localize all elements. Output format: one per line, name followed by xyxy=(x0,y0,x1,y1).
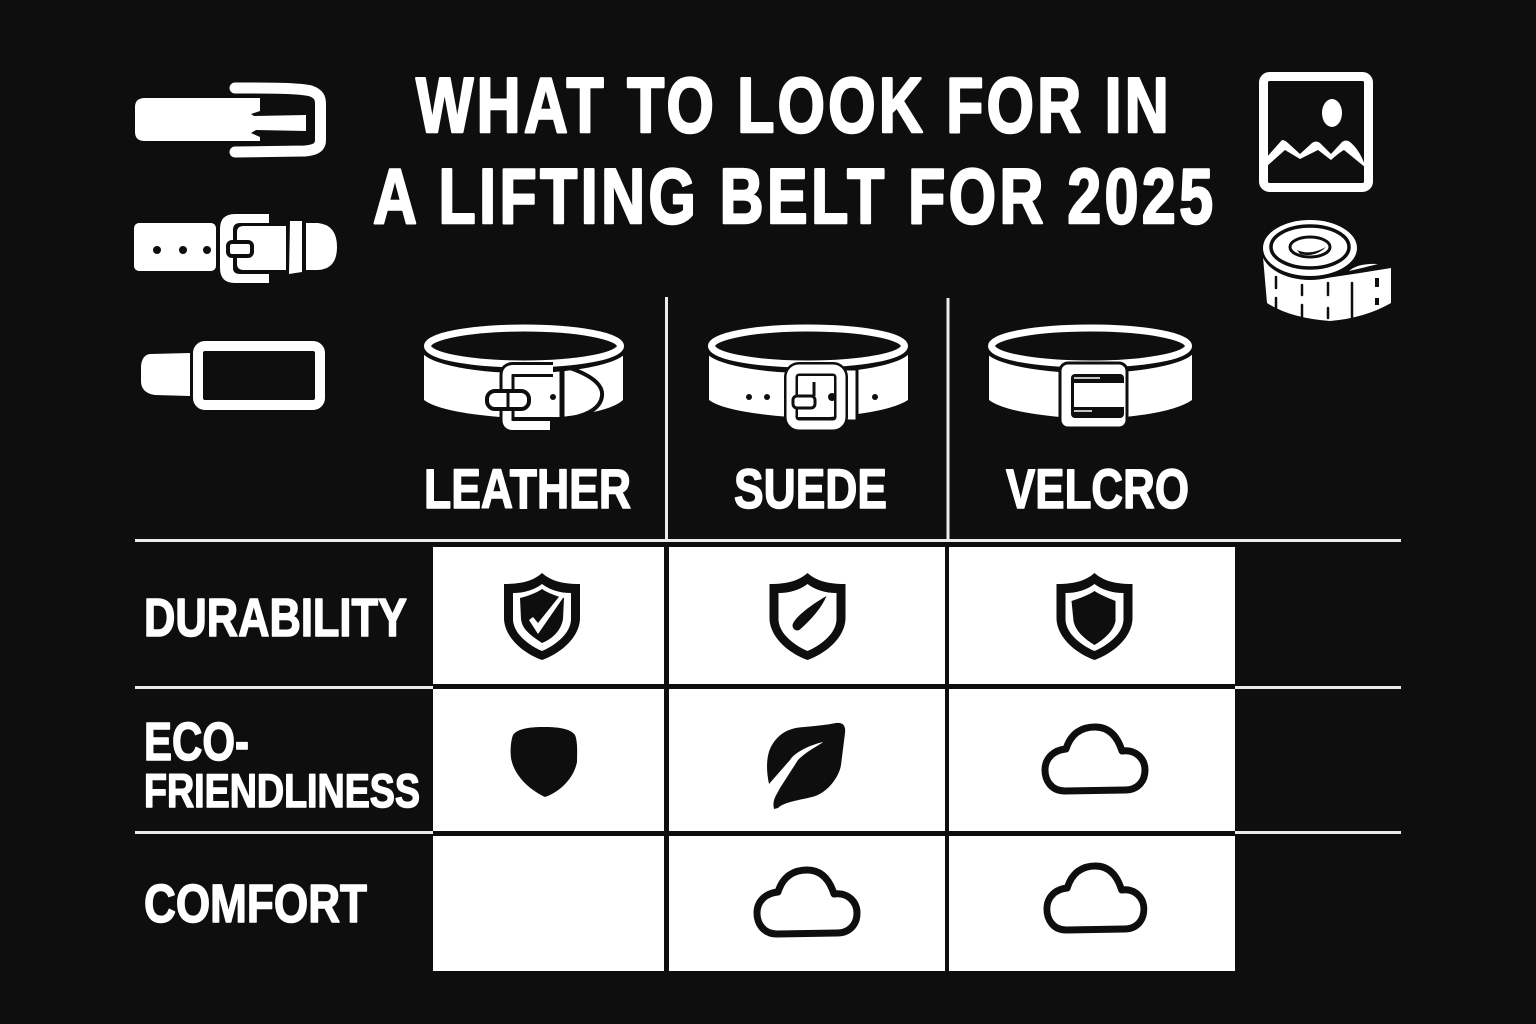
belt: suede xyxy=(704,323,912,425)
icon: shield outline xyxy=(1056,573,1132,660)
icon: image placeholder xyxy=(1264,76,1368,188)
icon: leaf xyxy=(767,723,845,809)
row label: durability: DURABILITY xyxy=(144,588,407,648)
row label: eco-friendliness: FRIENDLINESS xyxy=(144,764,420,817)
row label: eco-friendliness: ECO- xyxy=(144,712,249,772)
column divider lines xyxy=(665,297,950,540)
icon: cloud comfort velcro xyxy=(1047,866,1144,930)
icon: velcro belt xyxy=(141,346,320,405)
title xyxy=(373,62,1213,240)
belt: leather xyxy=(420,323,628,426)
column heading: velcro: VELCRO xyxy=(1006,457,1189,520)
icon: cloud eco velcro xyxy=(1045,727,1145,791)
row label: eco-friendliness xyxy=(144,712,420,817)
comparison table cells xyxy=(433,547,1235,971)
icon: shield with leaf xyxy=(770,573,846,660)
belt: velcro xyxy=(984,323,1196,428)
column heading: suede: SUEDE xyxy=(734,457,887,520)
column heading: leather: LEATHER xyxy=(424,457,631,520)
table row lines xyxy=(135,539,1401,834)
icon: prong belt xyxy=(135,88,320,152)
title: A LIFTING BELT FOR 2025 xyxy=(373,153,1213,240)
icon: solid shield xyxy=(511,727,577,797)
row label: comfort: COMFORT xyxy=(144,874,367,934)
icon: cloud comfort suede xyxy=(757,870,857,934)
icon: measuring tape xyxy=(1261,218,1391,321)
title: WHAT TO LOOK FOR IN xyxy=(416,62,1169,149)
icon: holed belt with buckle xyxy=(134,214,337,283)
icon: shield with check xyxy=(504,573,580,660)
